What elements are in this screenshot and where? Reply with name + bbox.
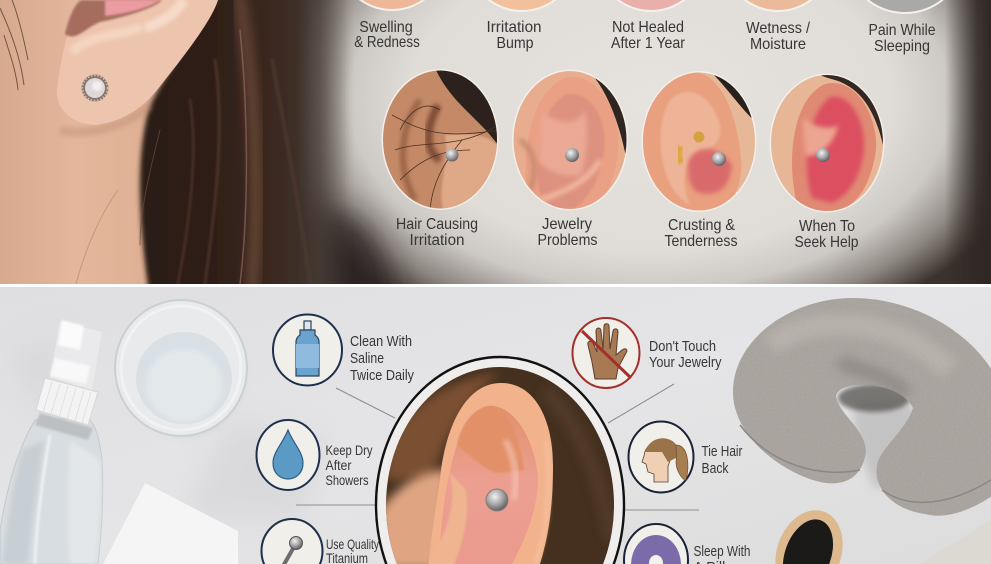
tip: clean with saline: Twice Daily bbox=[350, 368, 415, 384]
neck pillow bbox=[733, 298, 991, 516]
hair brush bbox=[775, 510, 843, 564]
symptom: when to seek help: When To bbox=[799, 218, 855, 235]
tip: use quality titanium: Use Quality bbox=[326, 536, 379, 552]
photo: ear with pearl stud bbox=[0, 0, 360, 300]
icon: titanium barbell bbox=[282, 536, 302, 564]
tip: keep dry: Keep Dry bbox=[326, 442, 372, 458]
symptom: not healed bbox=[611, 0, 686, 48]
central ear medallion bbox=[376, 357, 624, 564]
tip: keep dry: Showers bbox=[326, 472, 368, 488]
stud bbox=[565, 148, 579, 162]
tip: do not touch jewelry: Don't Touch bbox=[649, 339, 716, 355]
icon: head with ponytail bbox=[642, 438, 688, 482]
symptom: pain while sleeping: Pain While bbox=[868, 22, 936, 39]
icon: saline bottle bbox=[296, 321, 319, 376]
icon: crossed hand bbox=[582, 324, 631, 379]
panel: piercing problems bbox=[0, 0, 991, 284]
glass of water bbox=[115, 300, 247, 438]
icon: pearl stud bbox=[82, 74, 108, 102]
symptom: pain while sleeping: Sleeping bbox=[874, 38, 930, 55]
tip: keep dry: After bbox=[326, 457, 352, 473]
tip: tie hair back bbox=[628, 422, 743, 492]
symptom: jewelry problems bbox=[510, 66, 630, 249]
tip: clean with saline: Saline bbox=[350, 351, 384, 367]
spray bottle bbox=[0, 320, 103, 564]
symptom: hair causing irritation: Hair Causing bbox=[396, 216, 478, 233]
panel: aftercare bbox=[0, 287, 991, 564]
symptom: swelling and redness: Swelling bbox=[359, 19, 413, 36]
symptom: pain while sleeping bbox=[866, 0, 944, 54]
symptom: swelling and redness bbox=[354, 0, 425, 47]
symptom: wetness: Moisture bbox=[750, 36, 806, 53]
stud bbox=[816, 148, 830, 162]
symptom: when to seek help bbox=[768, 72, 886, 251]
symptom: wetness: Wetness / bbox=[746, 20, 811, 37]
symptom: wetness bbox=[744, 0, 812, 49]
tip: tie hair back: Tie Hair bbox=[702, 444, 743, 460]
tip: keep dry bbox=[256, 420, 372, 490]
ear lobe bbox=[57, 0, 218, 132]
symptom: when to seek help: Seek Help bbox=[794, 234, 859, 251]
symptom: swelling and redness: & Redness bbox=[354, 34, 420, 51]
symptom: crusting and tenderness bbox=[640, 70, 760, 250]
symptom: irritation bump: Irritation bbox=[486, 19, 542, 36]
gauze pad bbox=[103, 483, 238, 564]
symptom: hair causing irritation bbox=[380, 68, 500, 249]
tip: use quality titanium bbox=[262, 519, 379, 564]
symptom: not healed: After 1 Year bbox=[611, 35, 686, 52]
symptom: hair causing irritation: Irritation bbox=[410, 232, 464, 249]
tip: do not touch jewelry: Your Jewelry bbox=[649, 355, 722, 371]
stud bbox=[446, 148, 458, 162]
symptom: jewelry problems: Jewelry bbox=[542, 216, 592, 233]
tip: sleep with a pillow bbox=[624, 524, 750, 564]
stud bbox=[712, 152, 726, 166]
stud bbox=[486, 489, 508, 511]
tip: tie hair back: Back bbox=[702, 461, 729, 477]
symptom: crusting and tenderness: Tenderness bbox=[664, 233, 738, 250]
tip: do not touch jewelry bbox=[572, 318, 722, 388]
connector lines bbox=[296, 384, 699, 510]
symptom: irritation bump: Bump bbox=[496, 35, 534, 52]
tip: clean with saline bbox=[273, 314, 415, 386]
icon: purple travel pillow bbox=[631, 535, 681, 564]
symptom: irritation bump bbox=[488, 0, 556, 52]
symptom: jewelry problems: Problems bbox=[538, 232, 598, 249]
symptom: crusting and tenderness: Crusting & bbox=[668, 217, 735, 234]
tip: sleep with a pillow: Sleep With bbox=[694, 544, 750, 560]
icon: water drop bbox=[273, 430, 303, 479]
symptom: not healed: Not Healed bbox=[612, 19, 684, 36]
tip: clean with saline: Clean With bbox=[350, 334, 412, 350]
cloth corner bbox=[920, 520, 991, 564]
